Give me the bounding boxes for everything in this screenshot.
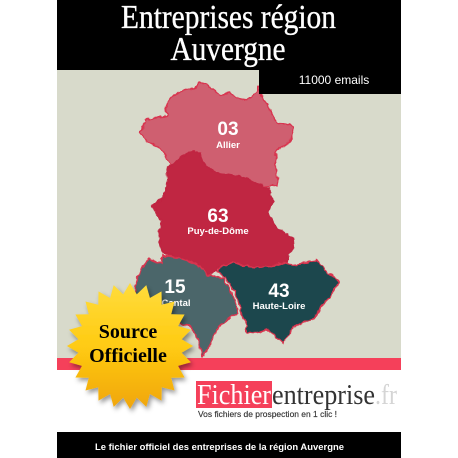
department 15 Cantal [135,255,238,357]
panel: title background [57,0,401,94]
department 15 Cantal: Cantal [161,298,191,309]
panel: map background [57,70,401,358]
department 63 Puy-de-Dôme [152,151,294,275]
logo: Fichierentreprise.fr: .fr [375,379,397,411]
email count: 11000 emails [299,73,369,87]
title: Auvergne [170,31,286,68]
logo: Fichierentreprise.fr: entreprise [272,379,375,411]
department 43 Haute-Loire [217,260,338,343]
logo: Fichierentreprise.fr [196,379,397,411]
badge: Source Officielle: Officielle [89,345,167,367]
badge: Source Officielle: Source [99,321,157,343]
logo tagline: Vos fichiers de prospection en 1 clic ! [198,409,337,419]
map: Auvergne departments [135,82,338,357]
department 63 Puy-de-Dôme: 63 [207,206,229,227]
title [121,0,336,68]
footer bar [57,432,401,458]
department 43 Haute-Loire: 43 [268,281,290,302]
badge: Source Officielle [67,283,193,409]
department 03 Allier [141,82,293,187]
red band [57,358,401,370]
title: Entreprises région [121,0,336,36]
logo: Fichierentreprise.fr: Fichier [197,379,271,411]
department 43 Haute-Loire: Haute-Loire [253,301,305,312]
department 03 Allier: 03 [217,119,239,140]
department 03 Allier: Allier [216,140,240,151]
department 63 Puy-de-Dôme: Puy-de-Dôme [187,226,249,237]
footer text: Le fichier officiel des entreprises de la région Auvergne [95,442,344,453]
department 15 Cantal: 15 [164,277,186,298]
